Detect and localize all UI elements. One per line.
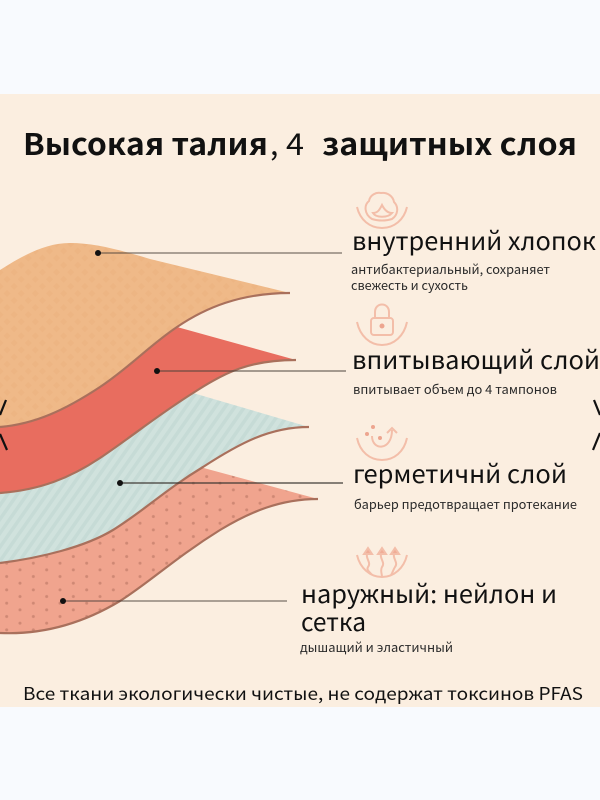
title: ,	[270, 120, 278, 164]
title: Высокая талия	[23, 120, 268, 164]
text: absorbent description: впитывает объем до 4 тампонов	[353, 379, 557, 398]
heading: barrier: герметичнй слой	[353, 455, 567, 491]
heading: inner cotton: внутренний хлопок	[352, 222, 596, 258]
heading: outer	[301, 575, 557, 639]
pointer: outer	[60, 598, 287, 604]
text: inner cotton description: свежесть и сухость	[351, 275, 468, 294]
layer: sealed barrier	[0, 393, 309, 563]
icon: sealed drops	[357, 425, 407, 460]
layer: absorbent	[0, 327, 296, 493]
heading: absorbent: впитывающий слой	[352, 341, 600, 377]
text: barrier description: барьер предотвращает протекание	[354, 494, 577, 513]
title	[23, 120, 577, 164]
icon: lock	[357, 304, 407, 345]
pointer: absorbent	[154, 368, 346, 374]
title: 4	[286, 120, 304, 164]
heading: outer: сетка	[301, 603, 366, 639]
heading: outer: наружный: нейлон и	[301, 575, 557, 611]
pointer: barrier	[117, 480, 343, 486]
background panel	[0, 94, 600, 707]
icon: breathable arrows	[357, 548, 407, 577]
pointer: inner cotton	[95, 250, 342, 256]
text: outer description: дышащий и эластичный	[300, 637, 453, 656]
layer: outer nylon and mesh	[0, 467, 318, 633]
icon: cotton	[357, 193, 407, 228]
text: inner cotton description	[351, 259, 551, 294]
left edge marks	[0, 400, 7, 450]
footer note: Все ткани экологически чистые, не содержат токсинов PFAS	[23, 681, 583, 706]
title: защитных слоя	[322, 120, 577, 164]
layer: inner cotton	[0, 243, 290, 427]
right edge marks	[593, 400, 600, 450]
text: inner cotton description: антибактериальный, сохраняет	[351, 259, 551, 278]
